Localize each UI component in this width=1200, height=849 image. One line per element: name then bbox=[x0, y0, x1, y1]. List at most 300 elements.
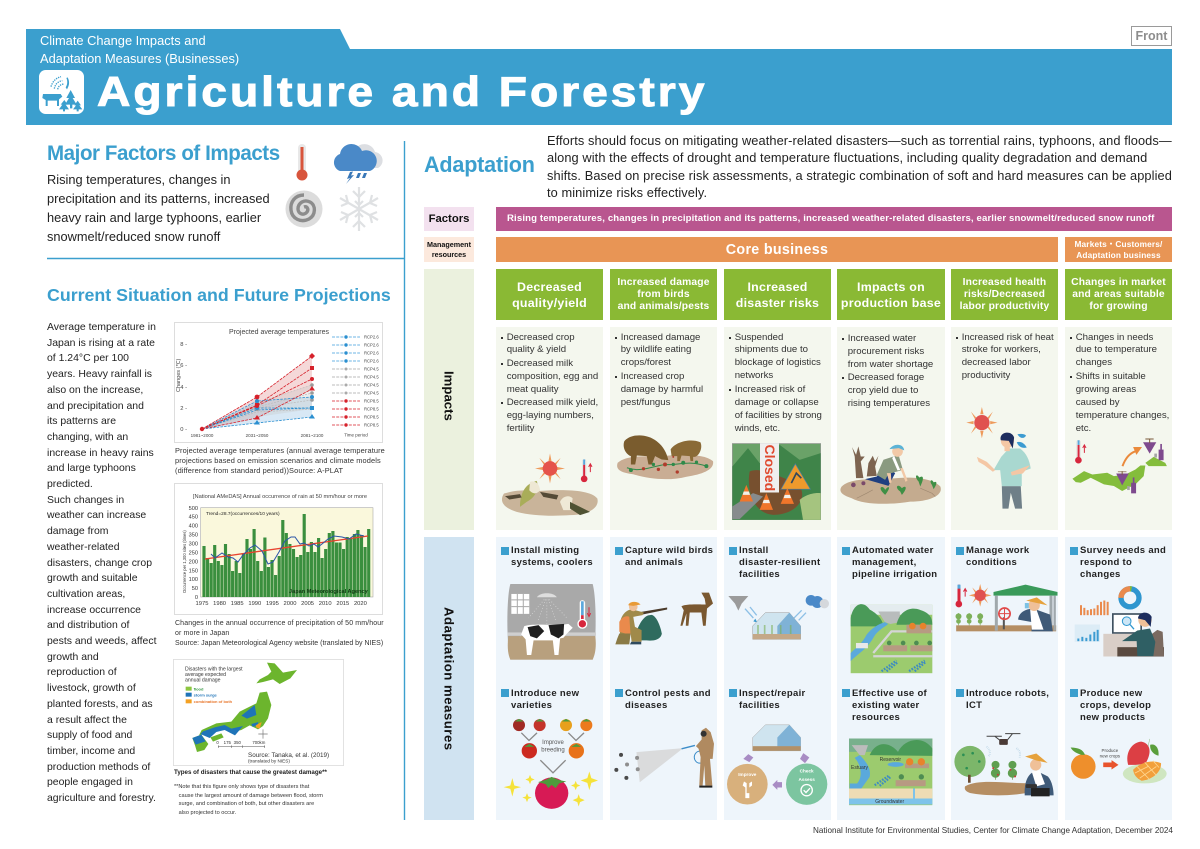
illustration: closed road landslide: Closed bbox=[762, 444, 778, 491]
impact list: shipments due to bbox=[735, 344, 808, 355]
caption: map note: cause the largest amount of damage between flood, storm bbox=[179, 793, 323, 799]
bar: core business bbox=[496, 237, 1058, 262]
current situation body text: disasters, change crop bbox=[47, 558, 152, 569]
chart: projected average temperatures: 2081~2100 bbox=[301, 433, 324, 438]
map: types of disasters in Japan: combination of both bbox=[194, 699, 233, 704]
chart: rain occurrence at 50 mm/hour: 400 bbox=[189, 524, 198, 530]
caption: rain chart bbox=[175, 620, 384, 647]
heading: increased disaster risks bbox=[724, 269, 831, 320]
illustration: water resources map: Reservoir bbox=[880, 757, 901, 763]
impact list: crop yield due to bbox=[848, 385, 918, 396]
chart: projected average temperatures: Projected average temperatures bbox=[229, 329, 329, 336]
heading: current situation: Current Situation and Future Projections bbox=[47, 285, 391, 305]
impact list: stroke for workers, bbox=[962, 344, 1041, 355]
panel: measures, column 3 bbox=[724, 537, 831, 820]
measure: capture wild birds: Capture wild birds bbox=[625, 545, 713, 556]
impact list: Increased water bbox=[848, 333, 916, 344]
title: Agriculture and Forestry bbox=[97, 68, 707, 115]
chart: projected average temperatures: RCP4.5 bbox=[364, 382, 379, 388]
caption: projected temperatures bbox=[175, 446, 385, 475]
impact list: changes bbox=[1076, 357, 1112, 368]
heading: impacts on production base bbox=[837, 269, 945, 320]
bullet square bbox=[615, 689, 623, 697]
chart: rain occurrence at 50 mm/hour: 450 bbox=[189, 514, 198, 520]
label: management resources: Management bbox=[427, 240, 471, 248]
panel: impact, market changes bbox=[1065, 327, 1172, 530]
current situation body text: and large typhoons bbox=[47, 463, 136, 474]
impact list: etc. bbox=[1076, 423, 1091, 434]
illustration: heat-stressed sun and wilted crops bbox=[502, 454, 598, 516]
impact list: of facilities by strong bbox=[735, 410, 822, 421]
chart: rain occurrence at 50 mm/hour: 1975 bbox=[196, 601, 208, 607]
label: adaptation measures bbox=[424, 537, 474, 820]
measure: manage work conditions: conditions bbox=[966, 557, 1017, 568]
impact list bbox=[729, 332, 822, 434]
caption: projected temperatures: Projected average temperatures (annual average temperature bbox=[175, 446, 385, 455]
chart: rain occurrence at 50 mm/hour: 200 bbox=[189, 560, 198, 566]
chart: rain occurrence at 50 mm/hour: 1985 bbox=[231, 601, 244, 607]
impact list: fertility bbox=[507, 423, 534, 434]
label: factors: Factors bbox=[429, 213, 469, 225]
chart: projected average temperatures: RCP8.5 bbox=[364, 406, 379, 412]
caption: map title: Types of disasters that cause the greatest damage** bbox=[174, 769, 327, 776]
illustration: new crops orange to mango: Produce bbox=[1102, 748, 1119, 753]
current situation body text: and distribution of bbox=[47, 620, 129, 631]
current situation body text: reproduction of bbox=[47, 667, 117, 678]
impact list bbox=[956, 332, 1054, 381]
impact list: by wildlife eating bbox=[621, 344, 691, 355]
impact list: Decreased forage bbox=[848, 372, 924, 383]
chart: projected average temperatures: RCP2.6 bbox=[364, 342, 379, 348]
measure: survey needs: Survey needs and bbox=[1080, 545, 1166, 556]
panel: measures, column 1 bbox=[496, 537, 603, 820]
chart: projected average temperatures: RCP4.5 bbox=[364, 390, 379, 396]
impact list: Increased damage bbox=[621, 332, 700, 342]
chart: projected average temperatures: RCP8.5 bbox=[364, 398, 379, 404]
bullet square bbox=[956, 689, 964, 697]
current situation body text: a result affect the bbox=[47, 715, 127, 726]
label: management resources: resources bbox=[432, 250, 466, 258]
current situation body text: years. Heavy rainfall is bbox=[47, 369, 152, 380]
impact list: rising temperatures bbox=[848, 398, 930, 409]
map: types of disasters in Japan: flood bbox=[194, 686, 204, 691]
measure: inspect/repair: Inspect/repair bbox=[739, 688, 806, 698]
measure: manage work conditions: Manage work bbox=[966, 545, 1029, 556]
measure: inspect/repair: facilities bbox=[739, 700, 780, 710]
chart: projected average temperatures: RCP2.6 bbox=[364, 350, 379, 356]
map: types of disasters in Japan bbox=[173, 659, 344, 766]
bullet square bbox=[842, 689, 850, 697]
caption: rain chart: Source: Japan Meteorological Agency website (translated by NIES) bbox=[175, 640, 383, 647]
measure: automated water management: management, bbox=[852, 557, 917, 568]
impact list: networks bbox=[735, 370, 773, 381]
impact list bbox=[842, 333, 933, 409]
illustration: market analysis at desk bbox=[1074, 585, 1165, 658]
heading: market changes bbox=[1065, 269, 1172, 320]
impact list: winds, etc. bbox=[735, 423, 780, 434]
heading: health risks: risks/Decreased bbox=[964, 288, 1045, 300]
impact list: Changes in needs bbox=[1076, 332, 1153, 342]
bullet square bbox=[729, 689, 737, 697]
impact list: damage or collapse bbox=[735, 397, 819, 408]
current situation body text: Japan is rising at a rate bbox=[47, 338, 155, 349]
label: management resources bbox=[424, 237, 474, 262]
chart: projected average temperatures: 2031~2050 bbox=[246, 433, 269, 438]
current situation body text: livestock, growth of bbox=[47, 683, 136, 694]
impact list bbox=[501, 332, 598, 434]
measure: automated water management bbox=[852, 545, 937, 581]
heading: decreased quality/yield: Decreased bbox=[517, 280, 582, 294]
illustration: tomato breeding: breeding bbox=[541, 748, 565, 754]
bullet square bbox=[729, 547, 737, 555]
measure: control pests: Control pests and bbox=[625, 688, 711, 698]
chart: rain occurrence at 50 mm/hour: 1990 bbox=[248, 601, 261, 607]
chart: rain occurrence at 50 mm/hour: 350 bbox=[189, 532, 198, 538]
illustration: new crops orange to mango: new crops bbox=[1100, 754, 1121, 759]
impact list: Decreased milk bbox=[507, 358, 573, 369]
impact list bbox=[1070, 332, 1169, 434]
bar: markets customers adaptation business: Adaptation business bbox=[1076, 250, 1161, 260]
chart: projected average temperatures: RCP2.6 bbox=[364, 358, 379, 364]
panel: measures, column 6 bbox=[1065, 537, 1172, 820]
impact list: due to temperature bbox=[1076, 344, 1157, 355]
chart: projected average temperatures: 2 - bbox=[180, 406, 187, 412]
current situation body text: growth and bbox=[47, 652, 99, 663]
current situation body text: increase in heavy rains bbox=[47, 448, 154, 459]
impact list: Increased risk of bbox=[735, 384, 805, 395]
current situation body text bbox=[47, 322, 156, 804]
measure: existing water resources: resources bbox=[852, 712, 900, 722]
impact list: from water shortage bbox=[848, 359, 933, 370]
current situation body text: Average temperature in bbox=[47, 322, 156, 333]
icon: thermometer bbox=[296, 144, 308, 180]
panel: impact, disaster risks bbox=[724, 327, 831, 530]
chart: rain occurrence at 50 mm/hour: 0 bbox=[195, 595, 198, 601]
heading: increased damage from birds: and animals/pests bbox=[618, 300, 709, 312]
panel: impact, decreased quality bbox=[496, 327, 603, 530]
measure: disaster-resilient facilities: facilities bbox=[739, 569, 780, 580]
bar: markets customers adaptation business bbox=[1065, 237, 1172, 262]
measure: automated water management: pipeline irrigation bbox=[852, 569, 937, 580]
impact list: composition, egg and bbox=[507, 371, 598, 382]
caption: map note bbox=[174, 784, 323, 816]
measure: inspect/repair bbox=[739, 688, 806, 710]
impact list: crops/forest bbox=[621, 357, 671, 368]
current situation body text: production methods of bbox=[47, 762, 150, 773]
impact list: egg-laying numbers, bbox=[507, 410, 594, 421]
measure: manage work conditions bbox=[966, 545, 1029, 569]
panel: measures, column 4 bbox=[837, 537, 945, 820]
chart: rain occurrence at 50 mm/hour: 2005 bbox=[301, 601, 314, 607]
caption: map note: also projected to occur. bbox=[179, 810, 236, 816]
measure: existing water resources: Effective use of bbox=[852, 688, 927, 698]
chart: projected average temperatures: 1981~2000 bbox=[191, 433, 214, 438]
chart: rain occurrence at 50 mm/hour: [National AMeDAS] Annual occurrence of rain at 50 mm/hour or more bbox=[193, 494, 367, 500]
chart: projected average temperatures: 8 - bbox=[180, 342, 187, 348]
chart: rain occurrence at 50 mm/hour: 2000 bbox=[284, 601, 296, 607]
chart: projected average temperatures: Time period bbox=[344, 432, 368, 438]
current situation body text: increase occurrence bbox=[47, 605, 141, 616]
panel: measures, column 5 bbox=[951, 537, 1058, 820]
chart: projected average temperatures: RCP8.5 bbox=[364, 414, 379, 420]
chart: rain occurrence at 50 mm/hour: 300 bbox=[189, 542, 198, 548]
measure: new crops: new products bbox=[1080, 712, 1145, 722]
map: types of disasters in Japan: storm surge bbox=[194, 693, 218, 698]
impact list: quality & yield bbox=[507, 344, 566, 355]
measure: automated water management: Automated water bbox=[852, 545, 934, 556]
bullet square bbox=[501, 689, 509, 697]
measure: capture wild birds: and animals bbox=[625, 557, 683, 568]
chart: rain occurrence at 50 mm/hour: 50 bbox=[192, 586, 198, 592]
header band bbox=[26, 29, 1172, 125]
illustration: worker sweating in sun bbox=[966, 407, 1031, 509]
measure: survey needs: respond to bbox=[1080, 557, 1132, 568]
chart: rain occurrence at 50 mm/hour: 2015 bbox=[336, 601, 349, 607]
chart: projected average temperatures bbox=[174, 322, 383, 443]
measure: disaster-resilient facilities bbox=[739, 545, 820, 580]
map: types of disasters in Japan: 0 bbox=[216, 740, 219, 745]
chart: rain occurrence at 50 mm/hour: 1980 bbox=[213, 601, 226, 607]
chart: rain occurrence at 50 mm/hour: 150 bbox=[189, 568, 198, 574]
adaptation intro text bbox=[547, 133, 1172, 200]
panel: impact, production base bbox=[837, 327, 945, 530]
impact list: temperature changes, bbox=[1076, 410, 1169, 421]
impact list: Increased crop bbox=[621, 371, 684, 382]
label: adaptation measures: Adaptation measures bbox=[442, 607, 456, 750]
icon: storm cloud bbox=[334, 144, 382, 184]
heading: market changes: Changes in market bbox=[1071, 276, 1166, 288]
illustration: resting worker under shade bbox=[955, 583, 1058, 633]
header subtitle: Adaptation Measures (Businesses) bbox=[40, 51, 239, 66]
measure: robots and ICT: Introduce robots, bbox=[966, 688, 1049, 698]
adaptation intro text: shifts. Based on precise risk assessments, a strategic combination of soft and hard measures can be applied bbox=[547, 168, 1172, 183]
impact list: procurement risks bbox=[848, 346, 924, 357]
adaptation intro text: to minimize risks effectively. bbox=[547, 185, 707, 200]
chart: projected average temperatures: 6 - bbox=[180, 363, 187, 369]
chart: rain occurrence at 50 mm/hour: Trend=28.7(occurrences/10 years) bbox=[206, 511, 280, 517]
bar: factors bbox=[496, 207, 1172, 231]
bar: factors: Rising temperatures, changes in precipitation and its patterns, increased weather-related disasters, earlier snowmelt/reduced snow runoff bbox=[507, 213, 1154, 224]
bullet square bbox=[615, 547, 623, 555]
impact list: meat quality bbox=[507, 384, 559, 395]
current situation body text: also on the increase, bbox=[47, 385, 143, 396]
heading: increased damage from birds: Increased damage bbox=[617, 276, 710, 288]
chart: projected average temperatures: 4 - bbox=[180, 385, 187, 391]
bullet square bbox=[1070, 689, 1078, 697]
chart: rain occurrence at 50 mm/hour: 1995 bbox=[266, 601, 279, 607]
chart: rain occurrence at 50 mm/hour: 2020 bbox=[354, 601, 367, 607]
heading: increased disaster risks: disaster risks bbox=[736, 296, 819, 310]
heading: increased damage from birds bbox=[610, 269, 717, 320]
map: types of disasters in Japan: 175 bbox=[224, 740, 231, 745]
illustration: wild boars eating crops bbox=[617, 435, 714, 480]
illustration: spraying pests bbox=[614, 728, 714, 788]
measure: capture wild birds bbox=[625, 545, 713, 568]
illustration: inspection cycle: Check bbox=[800, 768, 814, 774]
impact list: blockage of logistics bbox=[735, 357, 821, 368]
illustration: water resources map bbox=[848, 735, 933, 806]
current situation body text: supply of food and bbox=[47, 730, 132, 741]
illustration: inspection cycle: Assess bbox=[799, 777, 815, 782]
measure: misting systems: Install misting bbox=[511, 545, 579, 556]
measure: disaster-resilient facilities: Install bbox=[739, 545, 769, 556]
measure: robots and ICT: ICT bbox=[966, 700, 982, 710]
adaptation intro text: along with the effects of drought and temperature fluctuations, including quality degradation and demand bbox=[547, 150, 1147, 165]
header subtitle: Climate Change Impacts and bbox=[40, 33, 206, 48]
illustration: new crops orange to mango bbox=[1070, 738, 1168, 785]
measure: control pests bbox=[625, 688, 711, 710]
impact list: Decreased milk yield, bbox=[507, 397, 598, 408]
current situation body text: changing, with an bbox=[47, 432, 128, 443]
current situation body text: agriculture and forestry. bbox=[47, 793, 156, 804]
caption: projected temperatures: (difference from standard period))Source: A-PLAT bbox=[175, 466, 343, 475]
icon: agriculture and forestry bbox=[39, 70, 84, 114]
impact list: Decreased crop bbox=[507, 332, 575, 342]
current situation body text: growth and suitable bbox=[47, 573, 138, 584]
chart: rain occurrence at 50 mm/hour: 250 bbox=[189, 550, 198, 556]
current situation body text: people engaged in bbox=[47, 777, 133, 788]
measure: new varieties bbox=[511, 688, 579, 710]
illustration: farmer in dry field bbox=[840, 444, 941, 504]
bullet square bbox=[1070, 547, 1078, 555]
heading: increased disaster risks: Increased bbox=[747, 280, 808, 294]
caption: map note: surge, and combination of both, but other disasters are bbox=[179, 801, 314, 807]
illustration: tomato breeding bbox=[504, 718, 598, 809]
chart: rain occurrence at 50 mm/hour: Occurrence per 1,300 sites (times) bbox=[182, 530, 187, 593]
front tag: Front bbox=[1136, 29, 1167, 43]
heading: health risks: labor productivity bbox=[960, 300, 1049, 312]
chart: rain occurrence at 50 mm/hour: 2010 bbox=[319, 601, 332, 607]
heading: health risks: Increased health bbox=[963, 276, 1046, 288]
footer credit: National Institute for Environmental Studies, Center for Climate Change Adaptation, December 2024 bbox=[813, 826, 1173, 835]
bullet square bbox=[842, 547, 850, 555]
major factors text: Rising temperatures, changes in bbox=[47, 172, 231, 187]
current situation body text: and precipitation and bbox=[47, 401, 144, 412]
current situation body text: pests and weeds, affect bbox=[47, 636, 156, 647]
map: types of disasters in Japan: Source: Tanaka, et al. (2019) bbox=[248, 752, 329, 759]
measure: disaster-resilient facilities: disaster-resilient bbox=[739, 557, 820, 568]
bar: markets customers adaptation business: Markets・Customers/ bbox=[1074, 239, 1162, 249]
illustration: shifting growing areas map bbox=[1072, 438, 1167, 494]
measure: survey needs bbox=[1080, 545, 1166, 581]
major factors text: heavy rain and large typhoons, earlier bbox=[47, 210, 261, 225]
measure: control pests: diseases bbox=[625, 700, 668, 710]
impact list: Shifts in suitable bbox=[1076, 371, 1146, 382]
measure: misting systems: systems, coolers bbox=[511, 557, 593, 568]
current situation body text: planted forests, and as bbox=[47, 699, 153, 710]
illustration: tomato breeding: Improve bbox=[542, 740, 564, 746]
illustration: hunter and deer bbox=[615, 592, 713, 644]
illustration: irrigation landscape bbox=[850, 603, 933, 674]
caption: rain chart: or more in Japan bbox=[175, 630, 229, 637]
impact list bbox=[615, 332, 703, 408]
heading: market changes: for growing bbox=[1089, 300, 1148, 312]
impact list: decreased labor bbox=[962, 357, 1031, 368]
panel: impact, wildlife damage bbox=[610, 327, 717, 530]
measure: robots and ICT bbox=[966, 688, 1049, 712]
impact list: growing areas bbox=[1076, 384, 1136, 395]
bar: core business: Core business bbox=[726, 242, 828, 258]
major factors text bbox=[47, 172, 270, 244]
caption: projected temperatures: projections based on emission scenarios and climate models bbox=[175, 456, 381, 465]
front tag bbox=[1131, 26, 1172, 46]
map: types of disasters in Japan: Disasters with the largest bbox=[185, 667, 243, 673]
chart: rain occurrence at 50 mm/hour: Japan Meteorological Agency bbox=[289, 589, 369, 595]
impact list: caused by bbox=[1076, 397, 1120, 408]
heading: major factors: Major Factors of Impacts bbox=[47, 141, 280, 165]
icon: snowflake bbox=[340, 187, 378, 231]
current situation body text: cultivation areas, bbox=[47, 589, 125, 600]
current situation body text: weather-related bbox=[47, 542, 120, 553]
bullet square bbox=[956, 547, 964, 555]
illustration: drone and farmer bbox=[953, 730, 1055, 798]
impact list: damage by harmful bbox=[621, 384, 703, 395]
map: types of disasters in Japan: 350 bbox=[234, 740, 241, 745]
heading: increased damage from birds: from birds bbox=[637, 288, 690, 300]
current situation body text: Such changes in bbox=[47, 495, 124, 506]
label: factors bbox=[424, 207, 474, 231]
major factors text: precipitation and its patterns, increased bbox=[47, 191, 270, 206]
impact list: pest/fungus bbox=[621, 397, 670, 408]
measure: survey needs: changes bbox=[1080, 569, 1121, 580]
chart: rain occurrence at 50 mm/hour: 100 bbox=[189, 577, 198, 583]
impact list: productivity bbox=[962, 370, 1010, 381]
measure: misting systems bbox=[511, 545, 593, 568]
illustration: water resources map: Estuary bbox=[851, 765, 868, 771]
caption: rain chart: Changes in the annual occurrence of precipitation of 50 mm/hour bbox=[175, 620, 384, 627]
measure: new crops: Produce new bbox=[1080, 688, 1142, 698]
illustration: water resources map: Groundwater bbox=[875, 799, 904, 805]
current situation body text: predicted. bbox=[47, 479, 93, 490]
chart: rain occurrence at 50 mm/hour bbox=[174, 483, 383, 615]
illustration: inspection cycle bbox=[727, 724, 828, 805]
map: types of disasters in Japan: 700km bbox=[252, 740, 266, 745]
heading: decreased quality/yield: quality/yield bbox=[512, 296, 587, 310]
icon: typhoon spiral bbox=[286, 190, 322, 228]
map: types of disasters in Japan: annual damage bbox=[185, 678, 221, 684]
map: types of disasters in Japan: (translated by NIES) bbox=[248, 759, 290, 764]
illustration: inspection cycle: Improve bbox=[738, 772, 757, 777]
heading: impacts on production base: production base bbox=[841, 296, 941, 310]
label: impacts bbox=[424, 269, 474, 530]
major factors text: snowmelt/reduced snow runoff bbox=[47, 229, 220, 244]
chart: projected average temperatures: RCP2.6 bbox=[364, 334, 379, 340]
current situation body text: weather can increase bbox=[47, 510, 146, 521]
panel: impact, health risks bbox=[951, 327, 1058, 530]
chart: projected average temperatures: RCP8.5 bbox=[364, 422, 379, 428]
measure: new crops bbox=[1080, 688, 1151, 724]
measure: existing water resources bbox=[852, 688, 927, 724]
map: types of disasters in Japan: average expected bbox=[185, 672, 226, 678]
impact list: Increased risk of heat bbox=[962, 332, 1054, 342]
current situation body text: its patterns are bbox=[47, 416, 116, 427]
illustration: resilient greenhouse bbox=[728, 595, 829, 640]
heading: health risks bbox=[951, 269, 1058, 320]
chart: projected average temperatures: RCP4.5 bbox=[364, 374, 379, 380]
illustration: misting barn with cow bbox=[507, 584, 596, 660]
current situation body text: of 1.24°C per 100 bbox=[47, 353, 129, 364]
adaptation intro text: Efforts should focus on mitigating weather-related disasters—such as torrential rains, typhoons, and floods— bbox=[547, 133, 1172, 148]
chart: rain occurrence at 50 mm/hour: 500 bbox=[189, 506, 198, 512]
heading: impacts on production base: Impacts on bbox=[857, 280, 925, 294]
chart: projected average temperatures: 0 - bbox=[180, 427, 187, 433]
measure: existing water resources: existing water bbox=[852, 700, 920, 710]
heading: decreased quality/yield bbox=[496, 269, 603, 320]
chart: projected average temperatures: RCP4.5 bbox=[364, 366, 379, 372]
heading: market changes: and areas suitable bbox=[1072, 288, 1165, 300]
caption: map note: **Note that this figure only shows type of disasters that bbox=[174, 784, 309, 790]
current situation body text: timber, income and bbox=[47, 746, 135, 757]
